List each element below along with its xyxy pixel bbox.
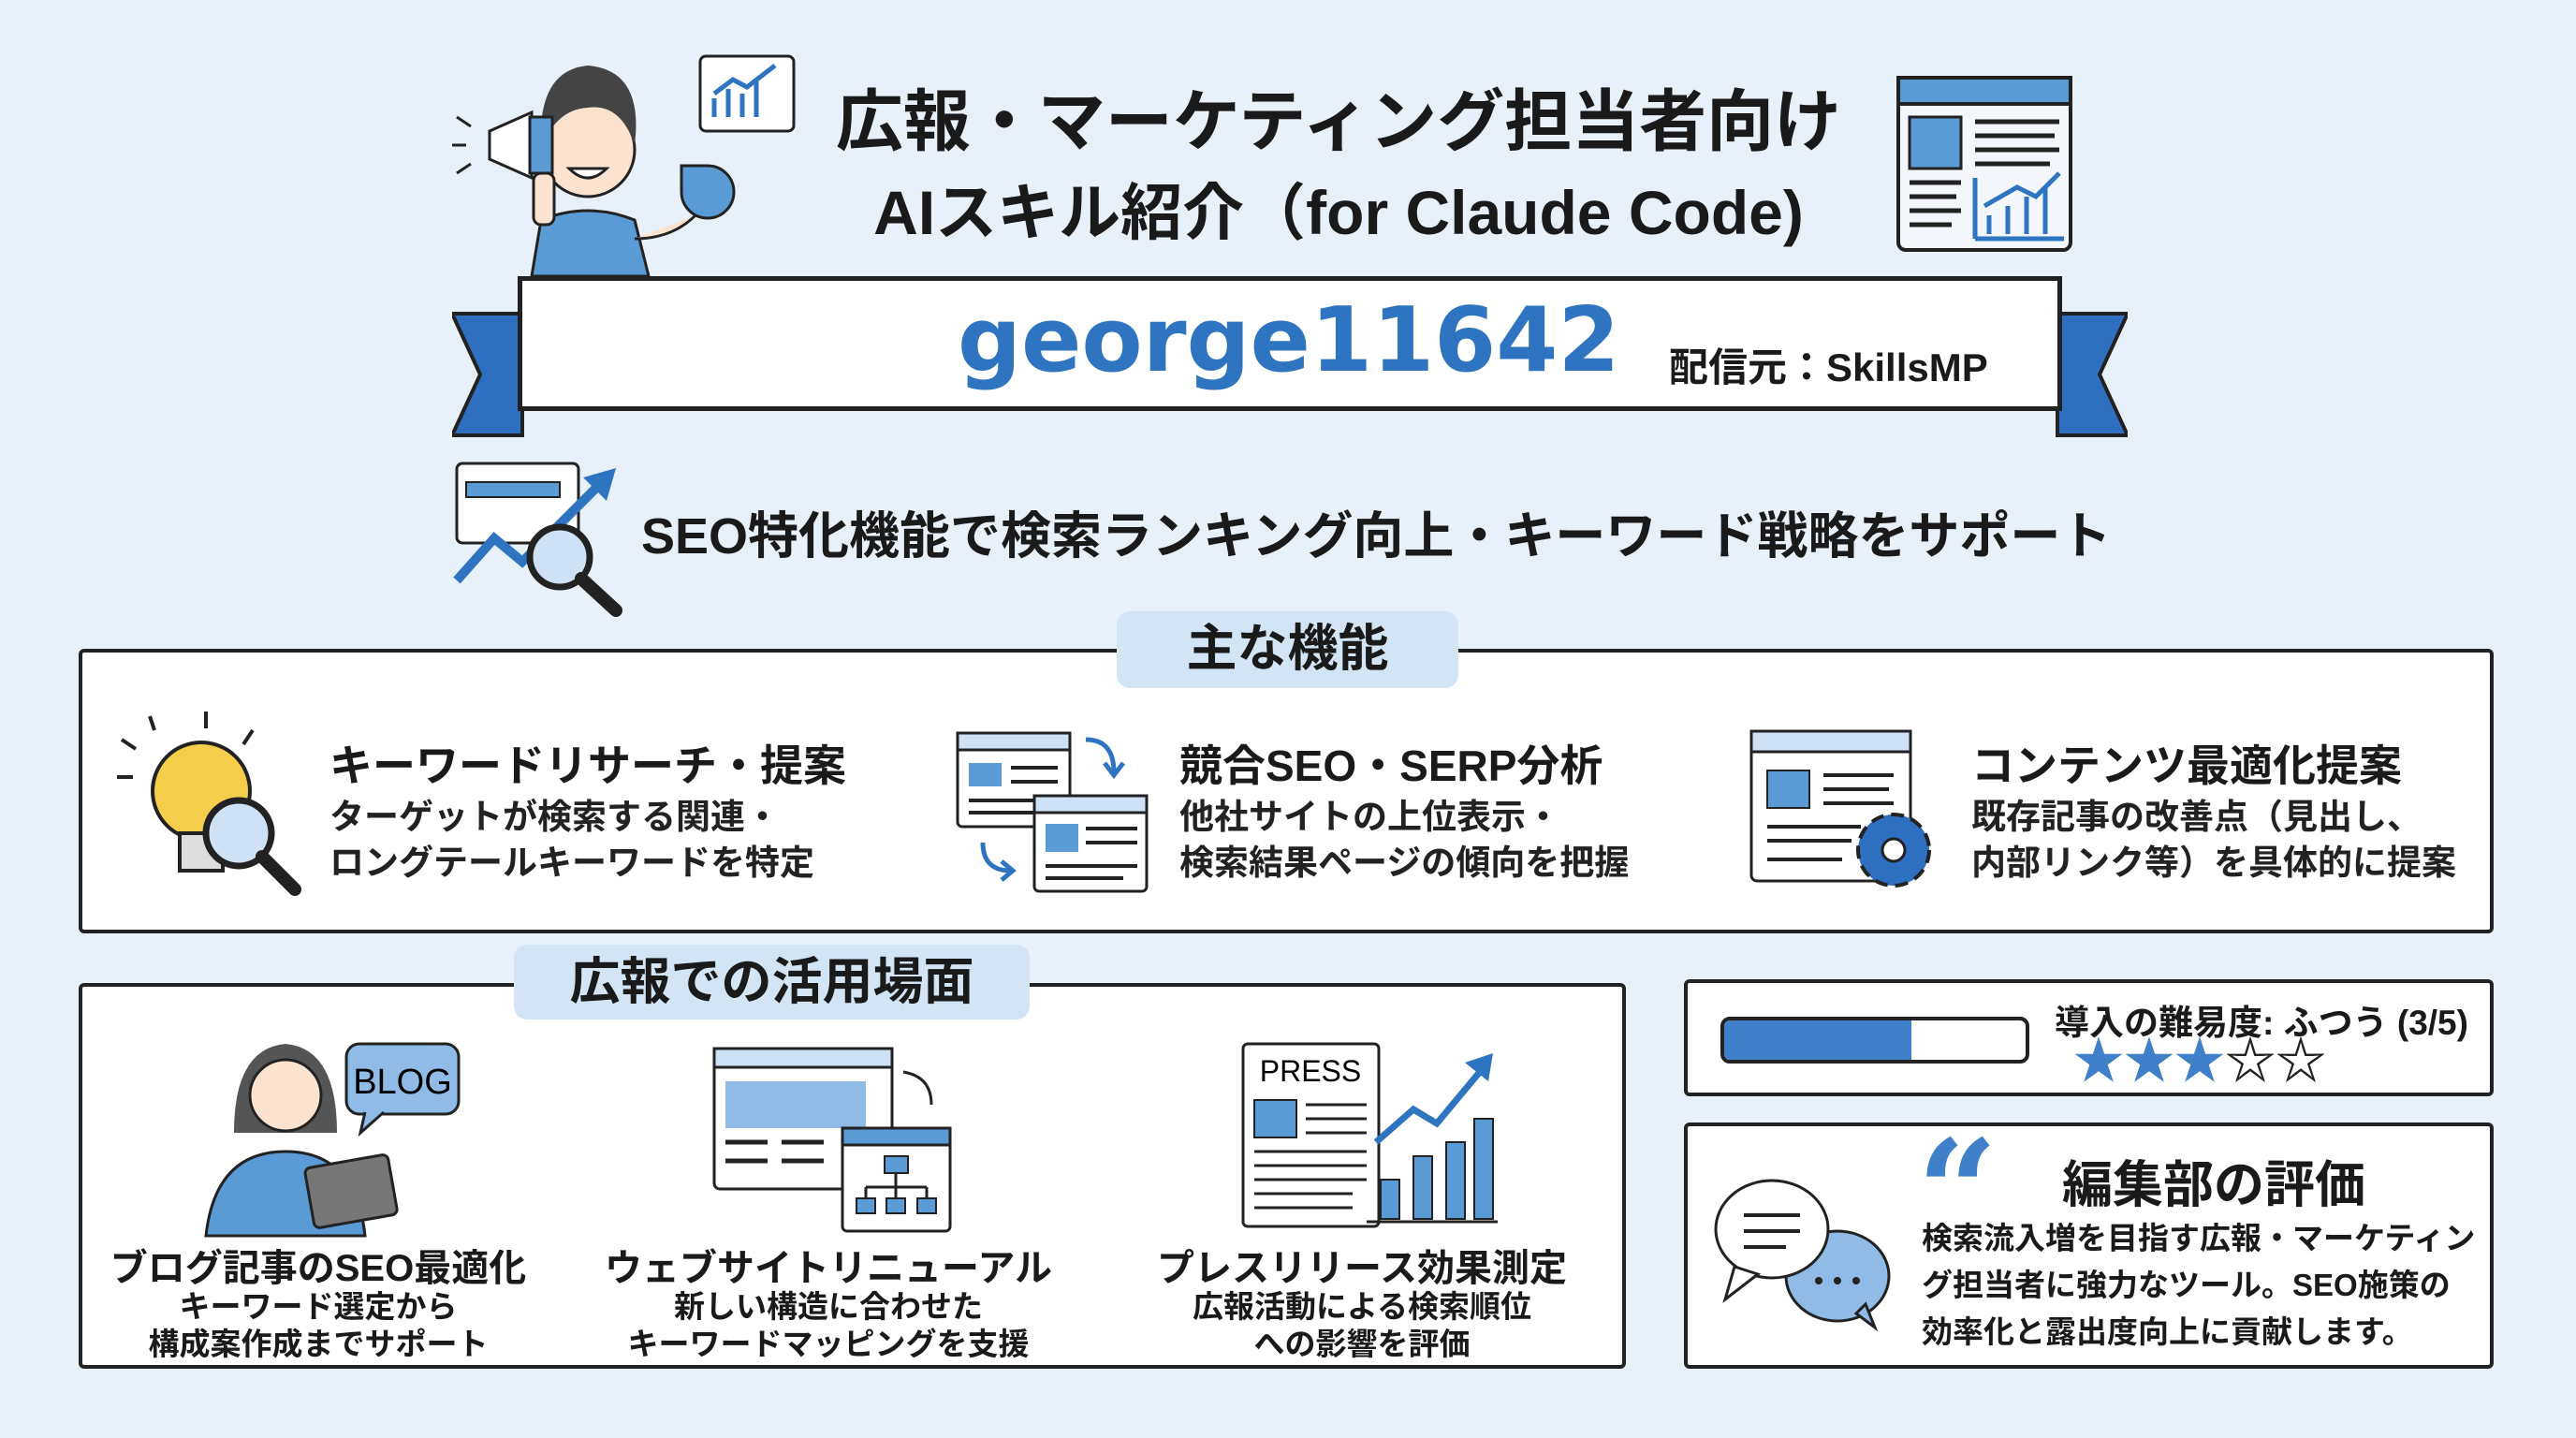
heading: PR use cases: 広報での活用場面 bbox=[569, 954, 973, 1010]
panel: main features bbox=[79, 649, 2494, 933]
icon: SEO magnifier chart bbox=[453, 462, 622, 617]
heading: main features: 主な機能 bbox=[1187, 621, 1389, 677]
feature 1: ターゲットが検索する関連・ bbox=[329, 798, 780, 836]
icon: press release chart: PRESS bbox=[1260, 1054, 1361, 1088]
feature 2: 競合SEO・SERP分析 bbox=[1179, 741, 1603, 790]
review text: 効率化と露出度向上に貢献します。 bbox=[1922, 1314, 2413, 1349]
use case 1: キーワード選定から bbox=[180, 1289, 457, 1324]
difficulty text: 導入の難易度: ふつう (3/5) bbox=[2055, 1004, 2468, 1042]
use case 2: ウェブサイトリニューアル bbox=[605, 1248, 1052, 1289]
use case 1: 構成案作成までサポート bbox=[148, 1327, 489, 1361]
panel: editorial review bbox=[1684, 1123, 2494, 1369]
source: 配信元：SkillsMP bbox=[1669, 345, 1988, 389]
feature 1 bbox=[117, 712, 846, 896]
feature 3: 内部リンク等）を具体的に提案 bbox=[1971, 844, 2456, 882]
use case 2: キーワードマッピングを支援 bbox=[627, 1327, 1030, 1361]
illustration: presenter with megaphone bbox=[452, 54, 796, 276]
icon: woman with tablet and BLOG bubble: BLOG bbox=[353, 1063, 452, 1102]
heading: PR use cases bbox=[514, 945, 1030, 1020]
icon: press release chart bbox=[1241, 1043, 1498, 1228]
use case 3: 広報活動による検索順位 bbox=[1193, 1289, 1531, 1324]
review text bbox=[1922, 1221, 2475, 1349]
title: AIスキル紹介（for Claude Code) bbox=[873, 178, 1804, 247]
icon: woman with tablet and BLOG bubble bbox=[204, 1043, 461, 1238]
use case 3: への影響を評価 bbox=[1254, 1327, 1470, 1361]
icon: dashboard window bbox=[1896, 76, 2072, 252]
ribbon banner bbox=[452, 276, 2128, 437]
subtitle: SEO特化機能で検索ランキング向上・キーワード戦略をサポート bbox=[641, 508, 2111, 565]
use case 3: プレスリリース効果測定 bbox=[1157, 1248, 1567, 1289]
progress bar bbox=[1720, 1017, 2029, 1064]
feature 1: ロングテールキーワードを特定 bbox=[329, 844, 814, 882]
use case 1: ブログ記事のSEO最適化 bbox=[110, 1248, 526, 1289]
quote mark: “ bbox=[1917, 1109, 1998, 1274]
panel: PR use cases bbox=[79, 983, 1626, 1369]
feature 2: 検索結果ページの傾向を把握 bbox=[1179, 844, 1629, 882]
feature 2: 他社サイトの上位表示・ bbox=[1179, 798, 1560, 836]
panel: difficulty bbox=[1684, 979, 2494, 1096]
title bbox=[836, 85, 1841, 247]
use case 1 bbox=[110, 1043, 526, 1361]
feature 3: コンテンツ最適化提案 bbox=[1971, 741, 2402, 790]
icon: speech bubbles bbox=[1715, 1180, 1891, 1331]
feature 1: キーワードリサーチ・提案 bbox=[329, 741, 846, 790]
feature 2 bbox=[957, 732, 1629, 893]
review heading: 編集部の評価 bbox=[2062, 1157, 2365, 1213]
name: george11642 bbox=[958, 289, 1619, 392]
feature 3 bbox=[1750, 730, 2456, 888]
use case 2: 新しい構造に合わせた bbox=[674, 1289, 983, 1324]
feature 3: 既存記事の改善点（見出し、 bbox=[1971, 798, 2422, 836]
icon: document with gear bbox=[1750, 730, 1931, 888]
stars: ★★★☆☆ bbox=[2073, 1034, 2326, 1090]
heading: main features bbox=[1117, 611, 1458, 688]
title: 広報・マーケティング担当者向け bbox=[836, 85, 1841, 160]
review text: グ担当者に強力なツール。SEO施策の bbox=[1922, 1268, 2451, 1302]
use case 2 bbox=[605, 1047, 1052, 1361]
icon: two windows compare bbox=[957, 732, 1148, 893]
use case 3 bbox=[1157, 1043, 1567, 1361]
icon: site map windows bbox=[713, 1047, 951, 1232]
icon: bulb magnifier bbox=[117, 712, 301, 896]
review text: 検索流入増を目指す広報・マーケティン bbox=[1922, 1221, 2475, 1255]
